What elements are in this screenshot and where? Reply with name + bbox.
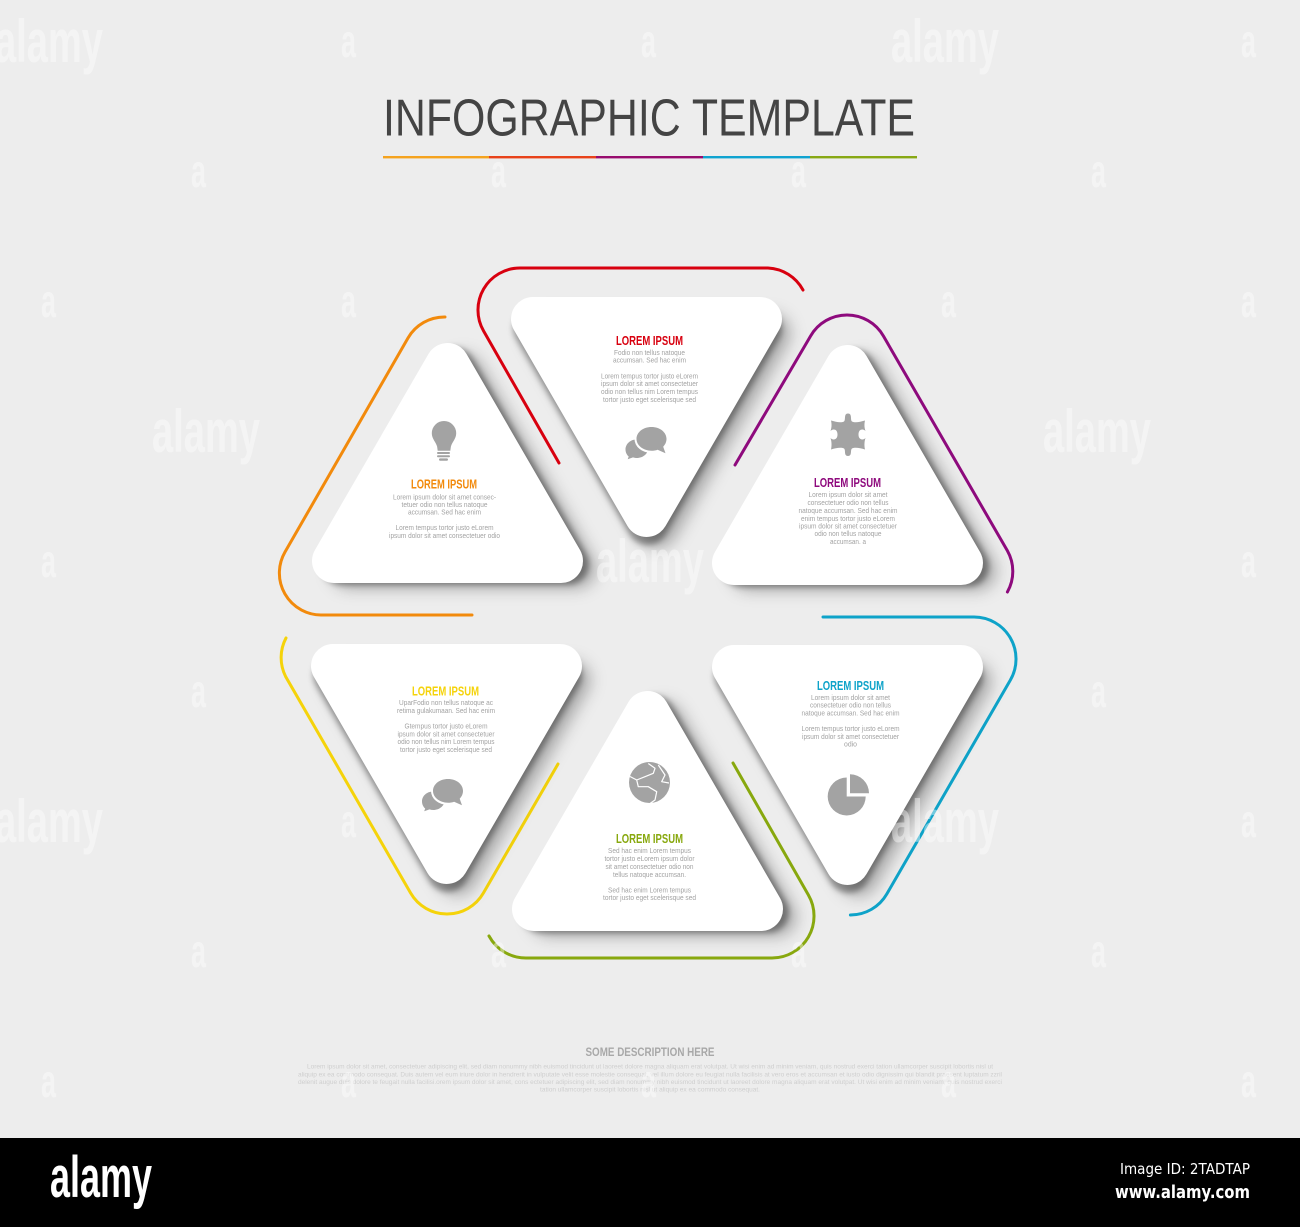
purple body text: accumsan. a — [830, 537, 866, 546]
green triangle — [534, 713, 761, 909]
watermarks: a — [641, 1055, 656, 1107]
panel: purple step — [734, 315, 1013, 592]
green heading: LOREM IPSUM — [616, 831, 683, 846]
icon: globe — [629, 762, 670, 804]
watermarks: a — [41, 1055, 56, 1107]
watermarks: a — [341, 15, 356, 67]
watermarks: alamy — [152, 398, 260, 465]
orange shadow — [341, 368, 577, 569]
red outline — [478, 268, 803, 463]
red shadow — [534, 328, 771, 529]
blue body text: Lorem tempus tortor justo eLorem — [802, 724, 900, 733]
description paragraph: delenit augue duis dolore te feugait nulla facilisi.orem ipsum dolor sit amet, cons ectetuer adipiscing elit, sed diam nonummy nibh euismod tincidunt ut laoreet dolore magna aliquam erat volutpat. Ut wisi enim ad minim veniam, quis nostrud exerci — [298, 1079, 1002, 1086]
description paragraph — [298, 1064, 1002, 1094]
blue body text — [802, 693, 900, 748]
description heading: SOME DESCRIPTION HERE — [586, 1047, 715, 1059]
orange body text: ipsum dolor sit amet consectetuer odio — [389, 531, 500, 540]
icon: pie chart — [828, 774, 869, 816]
watermarks: a — [941, 275, 956, 327]
red body text: Fodio non tellus natoque — [614, 348, 685, 357]
purple outline — [735, 315, 1013, 592]
green body text: Sed hac enim Lorem tempus — [608, 886, 691, 894]
yellow heading: LOREM IPSUM — [412, 684, 479, 698]
purple body text: ipsum dolor sit amet consectetuer — [799, 522, 898, 530]
red body text: odio non tellus nim Lorem tempus — [601, 387, 698, 396]
purple body text: Lorem ipsum dolor sit amet — [808, 490, 888, 499]
orange body text: accumsan. Sed hac enim — [408, 508, 481, 516]
icon: speech bubbles — [626, 425, 668, 459]
watermarks: a — [341, 795, 356, 847]
watermarks: a — [941, 1055, 956, 1107]
watermarks: a — [791, 925, 806, 977]
green body text: tellus natoque accumsan. — [613, 870, 686, 879]
watermarks: a — [341, 1055, 356, 1107]
blue body text: natoque accumsan. Sed hac enim — [802, 708, 900, 718]
orange body text — [389, 492, 500, 540]
red body text: accumsan. Sed hac enim — [613, 356, 686, 364]
blue triangle — [734, 667, 961, 863]
yellow body text — [397, 698, 495, 754]
green body text — [603, 846, 696, 902]
watermarks: a — [341, 535, 356, 587]
title underline — [383, 156, 917, 158]
icon: light bulb — [432, 421, 456, 461]
blue body text: Lorem ipsum dolor sit amet — [811, 693, 890, 702]
yellow shadow — [334, 675, 571, 876]
title: INFOGRAPHIC TEMPLATE — [383, 90, 915, 148]
icon: speech bubbles — [422, 777, 465, 811]
green body text: tortor justo eLorem ipsum dolor — [604, 854, 695, 863]
orange body text: Lorem ipsum dolor sit amet consec- — [393, 492, 497, 502]
orange body text: tetuer odio non tellus natoque — [402, 500, 488, 509]
watermarks: alamy — [0, 788, 103, 855]
watermarks: alamy — [891, 788, 999, 855]
description paragraph: Lorem ipsum dolor sit amet, consectetuer adipiscing elit, sed diam nonummy nibh euismod tincidunt ut laoreet dolore magna aliquam erat volutpat. Ut wisi enim ad minim veniam, quis nostrud exerci tation ullamcorper suscipit lobortis nisl ut — [307, 1064, 993, 1070]
red body text: ipsum dolor sit amet consectetuer — [601, 379, 699, 388]
watermarks: a — [41, 535, 56, 587]
yellow body text: Gtempus tortor justo eLorem — [404, 722, 488, 730]
panel: green step — [489, 713, 814, 958]
purple body text: natoque accumsan. Sed hac enim — [798, 506, 898, 515]
watermarks: a — [191, 145, 206, 197]
watermarks: a — [341, 275, 356, 327]
blue shadow — [735, 676, 972, 877]
red triangle — [533, 319, 760, 515]
watermarks: a — [1091, 925, 1106, 977]
orange outline — [279, 317, 472, 615]
yellow body text: tortor justo eget scelerisque sed — [400, 745, 492, 754]
yellow triangle — [333, 666, 560, 862]
watermarks: alamy — [891, 8, 999, 75]
blue body text: consectetuer odio non tellus — [810, 700, 891, 710]
panel: red step — [478, 268, 803, 529]
watermarks: alamy — [596, 528, 704, 595]
description paragraph: tation ullamcorper suscipit lobortis nisl ut aliquip ex ea commodo consequat. — [540, 1086, 760, 1094]
blue heading: LOREM IPSUM — [817, 678, 884, 693]
blue body text: ipsum dolor sit amet consectetuer — [802, 732, 900, 741]
orange body text: Lorem tempus tortor justo eLorem — [396, 523, 494, 532]
watermarks: a — [1091, 145, 1106, 197]
red body text: Lorem tempus tortor justo eLorem — [601, 372, 698, 380]
watermarks: a — [491, 925, 506, 977]
watermarks: a — [1241, 535, 1256, 587]
green body text: Sed hac enim Lorem tempus — [608, 846, 691, 855]
blue body text: odio — [844, 740, 857, 748]
green body text: tortor justo eget scelerisque sed — [603, 893, 696, 902]
purple body text: consectetuer odio non tellus — [808, 498, 889, 507]
orange triangle — [334, 365, 561, 561]
panel: orange step — [279, 317, 577, 615]
image id: Image ID: 2TADTAP — [1120, 1160, 1250, 1178]
footer bar — [0, 1138, 1300, 1227]
watermarks: a — [641, 15, 656, 67]
watermarks: a — [1241, 795, 1256, 847]
purple body text: enim tempus tortor justo eLorem — [801, 514, 895, 523]
green shadow — [541, 716, 777, 917]
purple shadow — [741, 370, 977, 571]
purple triangle — [734, 367, 961, 563]
yellow outline — [281, 638, 558, 914]
watermarks: a — [1241, 1055, 1256, 1107]
website: www.alamy.com — [1115, 1182, 1250, 1203]
orange heading: LOREM IPSUM — [411, 476, 477, 492]
description paragraph: aliquip ex ea commodo consequat. Duis autem vel eum iriure dolor in hendrerit in vulputate velit esse molestie consequat, vel illum dolore eu feugiat nulla facilisis at vero eros et accumsan et iusto odio dignissim qui blandit praesent luptatum zzril — [298, 1072, 1002, 1078]
panel: yellow step — [281, 638, 571, 914]
red body text — [601, 348, 699, 404]
watermarks: a — [1091, 665, 1106, 717]
watermarks: a — [41, 275, 56, 327]
watermarks: alamy — [1043, 398, 1151, 465]
watermarks: a — [1241, 15, 1256, 67]
purple body text — [798, 490, 898, 546]
green outline — [489, 763, 814, 958]
yellow body text: UparFodio non tellus natoque ac — [399, 698, 493, 707]
yellow body text: odio non tellus nim Lorem tempus — [398, 737, 495, 746]
icon: puzzle piece — [830, 414, 866, 456]
watermarks: a — [941, 535, 956, 587]
blue outline — [823, 617, 1016, 915]
yellow body text: retima gulakumaan. Sed hac enim — [397, 706, 495, 715]
watermarks: a — [191, 925, 206, 977]
watermarks: alamy — [0, 8, 103, 75]
yellow body text: ipsum dolor sit amet consectetuer — [398, 730, 495, 738]
purple body text: odio non tellus natoque — [814, 529, 882, 538]
green body text: sit amet consectetuer odio non — [606, 862, 694, 871]
purple heading: LOREM IPSUM — [814, 475, 881, 490]
watermarks: a — [491, 145, 506, 197]
footer logo: alamy — [50, 1145, 152, 1210]
watermarks: a — [191, 665, 206, 717]
watermarks: a — [791, 145, 806, 197]
panel: blue step — [734, 617, 1016, 915]
red heading: LOREM IPSUM — [616, 333, 683, 348]
watermarks: a — [1241, 275, 1256, 327]
red body text: tortor justo eget scelerisque sed — [603, 395, 696, 404]
